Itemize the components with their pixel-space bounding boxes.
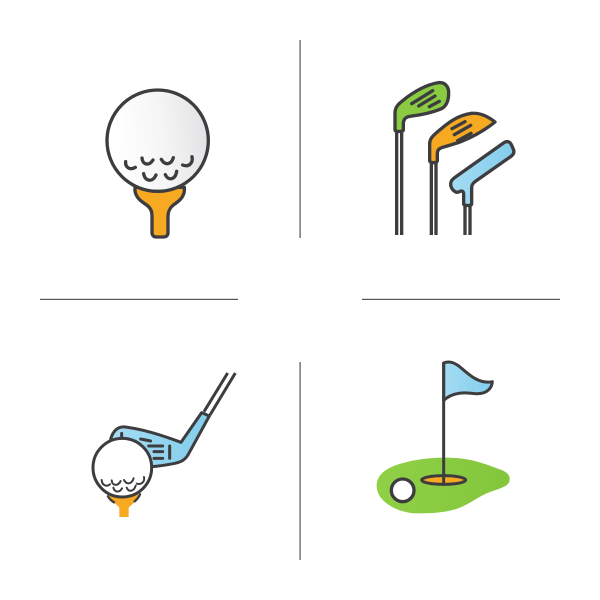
pole: [439, 363, 448, 484]
icon: golf ball on tee: [107, 90, 208, 237]
tee outline: [108, 494, 140, 502]
shaft: [204, 373, 235, 415]
tee: [108, 494, 140, 517]
green: [377, 458, 510, 513]
ball: [107, 90, 208, 191]
ball: [391, 479, 414, 502]
divider: bottom vertical: [300, 362, 301, 560]
dimples: [126, 157, 192, 180]
dimples: [102, 477, 144, 492]
orange wood club: [430, 113, 495, 235]
icon: flag on putting green: [377, 362, 510, 513]
hole: [422, 476, 466, 484]
divider: top vertical: [300, 40, 301, 238]
green wood club: [395, 83, 449, 235]
divider: right horizontal: [362, 299, 560, 300]
club grooves: [122, 433, 170, 458]
tee: [135, 187, 184, 237]
icon: club hitting ball on tee: [93, 373, 235, 517]
icon: three golf clubs: [395, 83, 514, 235]
club head: [111, 413, 209, 467]
blue putter club: [451, 142, 514, 235]
flag: [444, 362, 492, 400]
divider: left horizontal: [40, 299, 238, 300]
ball: [93, 438, 152, 497]
